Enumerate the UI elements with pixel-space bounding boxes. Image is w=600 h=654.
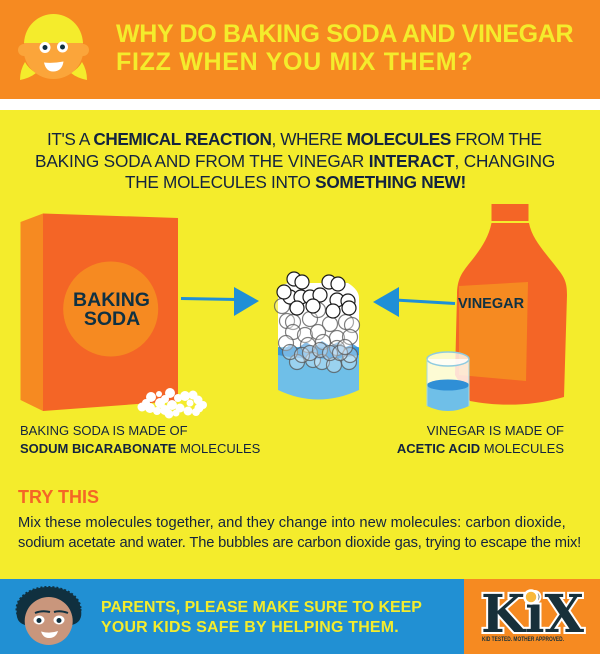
- arrow: soda to beaker: [180, 287, 259, 316]
- body text: try this: sodium acetate and water. The bubbles are carbon dioxide gas, trying to escape the mix!: [18, 535, 581, 551]
- caption: vinegar: VINEGAR IS MADE OF: [427, 423, 564, 438]
- illustration: baking soda box: SODA: [84, 308, 140, 330]
- footer message: YOUR KIDS SAFE BY HELPING THEM.: [101, 618, 399, 636]
- intro text: IT'S A CHEMICAL REACTION, WHERE MOLECULES FROM THE: [47, 129, 542, 149]
- caption: baking soda: BAKING SODA IS MADE OF: [20, 423, 188, 438]
- caption: baking soda: SODUM BICARABONATE MOLECULES: [20, 441, 260, 456]
- icon: girl face: [18, 14, 89, 80]
- illustration: vinegar bottle and glass: [426, 204, 567, 411]
- footer message: PARENTS, PLEASE MAKE SURE TO KEEP: [101, 599, 422, 616]
- top bubbles: [277, 272, 356, 318]
- title: WHY DO BAKING SODA AND VINEGAR: [116, 20, 573, 48]
- title: [116, 20, 573, 76]
- soda powder: [138, 388, 207, 418]
- caption: baking soda: [20, 423, 260, 456]
- caption: vinegar: ACETIC ACID MOLECULES: [397, 441, 564, 456]
- arrow: vinegar to beaker: [373, 287, 456, 317]
- logo tagline: KID TESTED. MOTHER APPROVED.: [482, 637, 564, 643]
- main yellow panel: [0, 110, 600, 579]
- bottle label: VINEGAR: [458, 296, 525, 312]
- footer: blue panel: [0, 579, 464, 654]
- box label: BAKING: [73, 289, 150, 311]
- footer message: [101, 599, 422, 636]
- illustration: fizzing beaker: [274, 271, 360, 400]
- glass of vinegar: [427, 352, 469, 411]
- intro text: THE MOLECULES INTO SOMETHING NEW!: [125, 172, 466, 192]
- faded bubbles: [274, 298, 360, 372]
- intro text: [35, 129, 555, 192]
- body text: try this: [18, 515, 581, 551]
- heading: try this: TRY THIS: [18, 487, 99, 507]
- illustration: baking soda box: [20, 214, 207, 418]
- title: FIZZ WHEN YOU MIX THEM?: [116, 48, 473, 76]
- footer: orange logo panel: [464, 579, 600, 654]
- icon: boy face: [16, 586, 82, 645]
- body text: try this: Mix these molecules together, and they change into new molecules: carbon dioxide,: [18, 515, 566, 531]
- logo: Kix: KiX: [481, 584, 585, 645]
- header band: [0, 0, 600, 110]
- intro text: BAKING SODA AND FROM THE VINEGAR INTERACT, CHANGING: [35, 150, 555, 170]
- caption: vinegar: [397, 423, 564, 456]
